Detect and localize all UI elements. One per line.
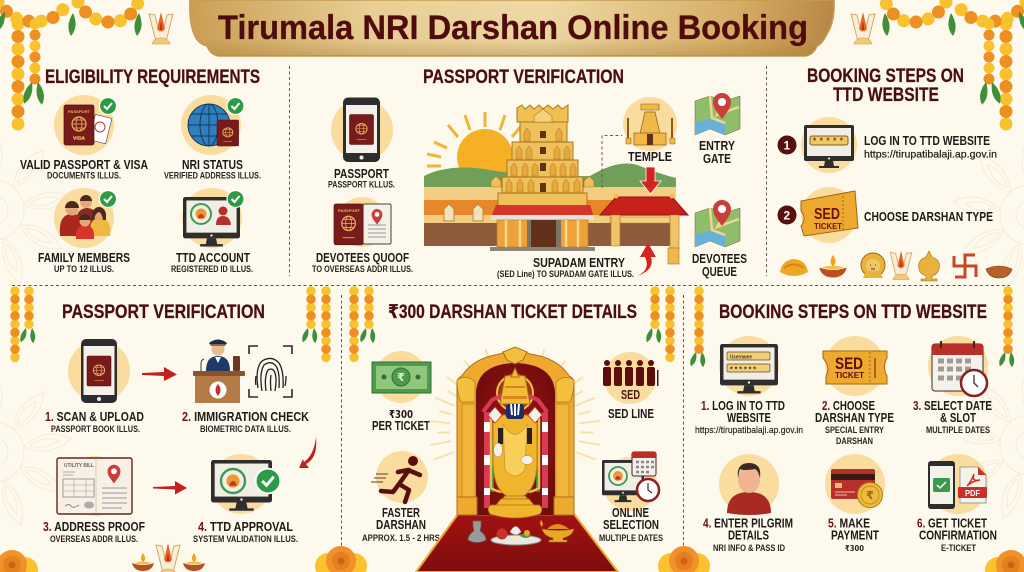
step 2: 2 [784,208,790,222]
step 5 make payment: 5. MAKE [828,516,870,530]
step 2 immigration check [182,340,309,434]
item: online selection [599,452,663,543]
marigolds: bottom corners and dividers [0,546,1024,572]
label: supadam entry [497,255,634,279]
icon: devotees queue map [692,200,747,279]
illustration: temple complex [424,105,688,264]
ornament: diyas and namam [132,543,205,572]
heading: ttd website: TTD WEBSITE [833,85,939,106]
arrow: step 3 to 4 [153,481,187,494]
panel: passport verification bottom [43,302,316,544]
panel: darshan ticket details [362,302,663,572]
icon: entry gate map: GATE [703,152,731,166]
step 2 choose darshan type: DARSHAN TYPE [815,411,894,425]
arrow: curved red [637,243,656,276]
step 1: 1 [784,138,790,152]
item: online selection: MULTIPLE DATES [599,533,663,543]
step 4 TTD approval: 4. TTD APPROVAL [198,520,293,534]
item: devotees quoof: PASSPORT [338,208,361,213]
step 6 ticket confirmation [917,454,997,553]
icon: entry gate map [695,93,740,166]
step 3 select date: MULTIPLE DATES [926,425,990,435]
step 6 ticket confirmation: 6. GET TICKET [917,516,987,530]
step 2 choose darshan type: 2. CHOOSE [822,399,875,413]
item: TTD account [171,188,253,274]
item: faster darshan: APPROX. 1.5 - 2 HRS [362,533,440,543]
deity figure [483,368,547,508]
heading: bottom passport verification: PASSPORT VERIFICATION [62,302,265,323]
step 5 make payment [825,454,885,553]
garland: top right [882,2,1024,132]
step 2: CHOOSE DARSHAN TYPE [864,210,993,224]
icons: ritual ornaments row [780,251,1012,281]
step 1: LOG IN TO TTD WEBSITE [864,134,990,148]
step 1 log in: 1. LOG IN TO TTD [701,399,785,413]
icon: namam top right [851,12,875,44]
item: per ticket [372,351,431,433]
step 6 ticket confirmation: CONFIRMATION [919,528,997,542]
item: TTD account: TTD ACCOUNT [176,251,250,265]
item: passport phone: PASSPORT [334,167,389,181]
item: faster darshan: DARSHAN [376,518,426,532]
icon: namam top left [149,12,173,44]
step 4 TTD approval [193,454,298,544]
step 3 address proof: OVERSEAS ADDR ILLUS. [50,534,138,544]
step 1 scan and upload [45,339,144,434]
panel: booking steps top right [778,66,1012,281]
label: supadam entry: (SED Line) TO SUPADAM GATE ILLUS. [497,269,634,279]
step 5 make payment: ₹ [866,489,874,502]
item: family members [38,188,130,274]
label: temple: TEMPLE [628,150,672,164]
step 1 log in: https://tirupatibalaji.ap.gov.in [695,425,803,436]
label: supadam entry: SUPADAM ENTRY [533,255,625,270]
icon: entry gate map: ENTRY [699,139,736,153]
step 2: SED [814,206,840,223]
connector: dashed [602,136,622,188]
step 3 select date: 3. SELECT DATE [913,399,992,413]
step 6 ticket confirmation: E-TICKET [941,543,976,553]
title banner [190,0,834,56]
step 2 choose darshan type: SPECIAL ENTRY [825,425,884,435]
item: faster darshan: FASTER [382,506,420,520]
item: per ticket: ₹300 [389,408,413,421]
step 3 select date [913,336,992,435]
step 2 [778,187,993,243]
item: NRI status: VERIFIED ADDRESS ILLUS. [164,170,261,180]
item: online selection: ONLINE [612,506,649,520]
step 1 log in [695,336,803,436]
step 5 make payment: ₹300 [845,544,864,553]
illustration: deity shrine [416,347,618,572]
golden arch [457,348,574,515]
item: devotees quoof [312,197,413,274]
step 6 ticket confirmation: PDF [965,488,980,498]
item: SED line [603,352,658,421]
step 4 enter pilgrim details: 4. ENTER PILGRIM [703,516,793,530]
step 2 choose darshan type: TICKET [835,370,865,380]
item: valid passport and visa: PASSPORT [68,109,91,114]
step 4 enter pilgrim details [703,454,793,553]
step 2 immigration check: BIOMETRIC DATA ILLUS. [200,424,291,434]
step 2 choose darshan type [815,336,894,446]
step 2: TICKET [814,221,843,231]
item: online selection: SELECTION [603,518,659,532]
step 5 make payment: PAYMENT [831,528,879,542]
heading: passport verification: PASSPORT VERIFICATION [423,67,624,88]
step 1: https://tirupatibalaji.ap.gov.in [864,148,997,160]
step 2 choose darshan type: SED [835,354,863,373]
garland: top left [0,2,142,132]
arrow: step 2 to 4 [299,437,316,468]
item: valid passport and visa: VISA [73,136,85,142]
item: per ticket: ₹ [397,371,405,384]
step 3 address proof: 3. ADDRESS PROOF [43,520,145,534]
step 1 scan and upload: 1. SCAN & UPLOAD [45,410,144,424]
step 4 enter pilgrim details: NRI INFO & PASS ID [713,543,785,553]
pedestal [488,499,542,518]
item: passport phone: PASSPORT KLLUS. [328,180,395,190]
step 2 choose darshan type: DARSHAN [836,436,873,446]
item: devotees quoof: DEVOTEES QUOOF [316,251,409,265]
item: devotees quoof: TO OVERSEAS ADDR ILLUS. [312,264,413,274]
icon: devotees queue map: QUEUE [702,265,737,279]
step 1 log in: Username [730,354,752,360]
icon: devotees queue map: DEVOTEES [692,252,747,266]
panel: booking steps bottom right [695,302,997,553]
arrow: temple to gate [640,167,661,194]
step 3 address proof [43,456,145,544]
item: NRI status: NRI STATUS [182,158,243,172]
item: NRI status [164,95,261,180]
heading: booking steps: BOOKING STEPS ON [807,66,964,87]
garlands: lower panels [15,291,1016,367]
step 1 [778,117,997,173]
step 4 enter pilgrim details: DETAILS [728,528,769,542]
panel: eligibility requirements [20,67,261,274]
step 1 scan and upload: PASSPORT BOOK ILLUS. [51,424,140,434]
step 3 select date: & SLOT [940,411,976,425]
step 1 log in: WEBSITE [727,411,771,425]
rays behind arch [429,349,601,459]
item: SED line: SED LINE [608,407,654,421]
title banner: Tirumala NRI Darshan Online Booking [218,9,808,47]
step 1: ***** [813,136,844,146]
step 2 immigration check: 2. IMMIGRATION CHECK [182,410,309,424]
panel: passport verification top [312,67,747,279]
item: per ticket: PER TICKET [372,419,430,433]
item: passport phone [328,98,395,190]
heading: eligibility: ELIGIBILITY REQUIREMENTS [45,67,260,88]
step 1 log in: ****** [730,366,756,374]
item: TTD account: REGISTERED ID ILLUS. [171,264,253,274]
arrow: step 1 to 2 [142,367,177,381]
item: SED line: SED [621,388,640,402]
item: family members: FAMILY MEMBERS [38,251,130,265]
heading: ticket details: ₹300 DARSHAN TICKET DETAILS [388,302,637,323]
red carpet [416,514,618,572]
offerings [468,520,574,545]
item: valid passport and visa: VALID PASSPORT & VISA [20,158,148,172]
step 3 address proof: UTILITY BILL [64,463,95,469]
item: valid passport and visa: DOCUMENTS ILLUS. [47,170,121,180]
item: faster darshan [362,451,440,543]
icon: small temple [623,97,677,151]
item: valid passport and visa [20,95,148,180]
item: family members: UP TO 12 ILLUS. [54,264,114,274]
step 4 TTD approval: SYSTEM VALIDATION ILLUS. [193,534,298,544]
